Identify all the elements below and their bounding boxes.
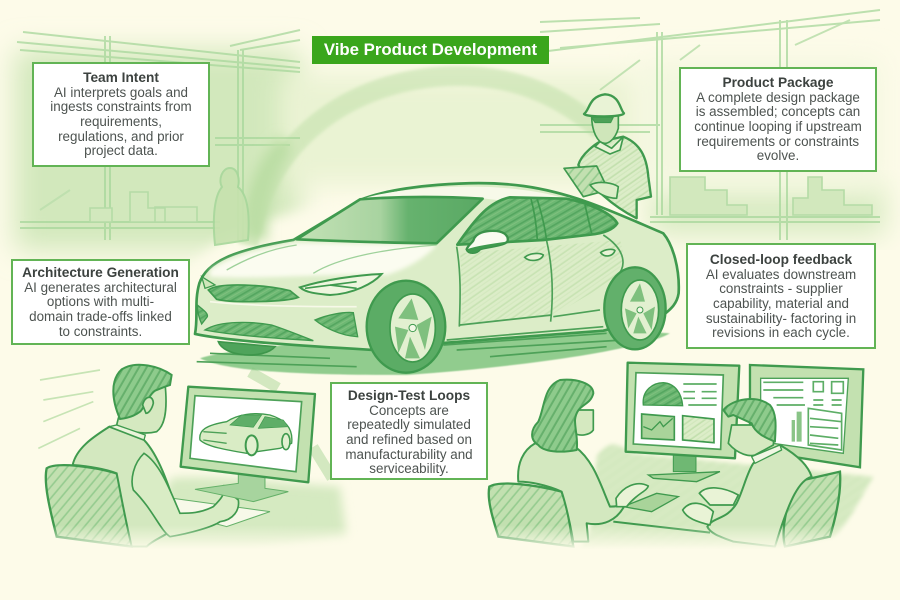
callout: design-test loops: Design-Test Loops [348,388,470,403]
right team: keyboard and pad [623,472,720,512]
right team: woman [518,380,648,542]
monitor: car thumbnail [200,414,292,453]
car: front grille [208,285,298,302]
car: body [195,183,679,350]
callout: closed-loop feedback: revisions in each cycle. [712,325,850,340]
callout: product package: is assembled; concepts can [696,104,860,119]
left designer: arm [132,453,239,537]
callout: design-test loops: Concepts are [369,403,449,418]
callout: product package: Product Package [722,75,834,90]
callout: architecture generation: AI generates architectural [24,280,177,295]
callout: architecture generation [11,259,190,345]
title: Vibe Product Development [324,40,537,59]
car [195,183,679,375]
callout: team intent: Team Intent [83,70,159,85]
callout: team intent: ingests constraints from [50,99,192,114]
callout: product package [679,67,877,172]
title [312,36,549,64]
callout: team intent: AI interprets goals and [54,85,188,100]
callout: design-test loops: and refined based on [346,432,472,447]
callout: team intent: project data. [84,143,158,158]
callout: design-test loops: manufacturability and [345,447,473,462]
left designer: monitor [181,387,315,502]
callout: design-test loops: serviceability. [369,461,449,476]
callout: team intent [32,62,210,167]
car: front wheel [367,281,445,373]
car: hood highlight [210,243,437,278]
right team: man chair [784,472,840,547]
right team: woman chair [489,484,573,547]
callout: product package: A complete design package [696,90,860,105]
left designer: chair [46,465,132,547]
left designer at desk [38,365,347,550]
right team at desk [489,363,873,550]
callout: architecture generation: to constraints. [59,324,142,339]
car: lower vents [197,305,358,341]
callout: team intent: requirements, [80,114,162,129]
callout: architecture generation: Architecture Generation [22,265,179,280]
engineer: torso [578,137,651,218]
engineer with tablet [564,94,651,218]
callout: closed-loop feedback: AI evaluates downstream [706,267,856,282]
background: factory windows [15,10,885,478]
car: ground shadow [197,331,670,375]
callout: architecture generation: options with multi- [47,294,154,309]
car: side windows [457,197,617,245]
callout: product package: requirements or constraints [697,134,859,149]
callout: closed-loop feedback: capability, material and [713,296,849,311]
callout: design-test loops [330,382,488,480]
left designer: head and hair [109,365,172,440]
engineer: tablet [564,166,608,197]
callout: architecture generation: domain trade-offs linked [29,309,172,324]
car: door handles [525,249,615,260]
car: headlight [300,274,382,295]
right team: man [683,399,812,547]
left designer: hatch strokes [38,370,100,448]
car: rear wheel [604,267,666,349]
callout: design-test loops: repeatedly simulated [347,417,471,432]
right team: back monitor [750,365,863,467]
callout: closed-loop feedback [686,243,876,349]
callout: product package: evolve. [757,148,799,163]
callout: product package: continue looping if upstream [694,119,862,134]
engineer: hand and cuff [590,182,618,198]
callout: closed-loop feedback: Closed-loop feedback [710,252,852,267]
callout: closed-loop feedback: sustainability- factoring in [706,311,856,326]
engineer: head and hard hat [584,94,624,154]
left designer: torso [73,427,180,547]
car: mirror [467,231,508,253]
car: windshield [297,197,483,243]
right team: desk [580,444,873,550]
right team: front monitor [626,363,739,472]
callout: team intent: regulations, and prior [58,129,184,144]
left designer: desk [147,477,347,550]
callout: closed-loop feedback: constraints - supplier [719,281,843,296]
